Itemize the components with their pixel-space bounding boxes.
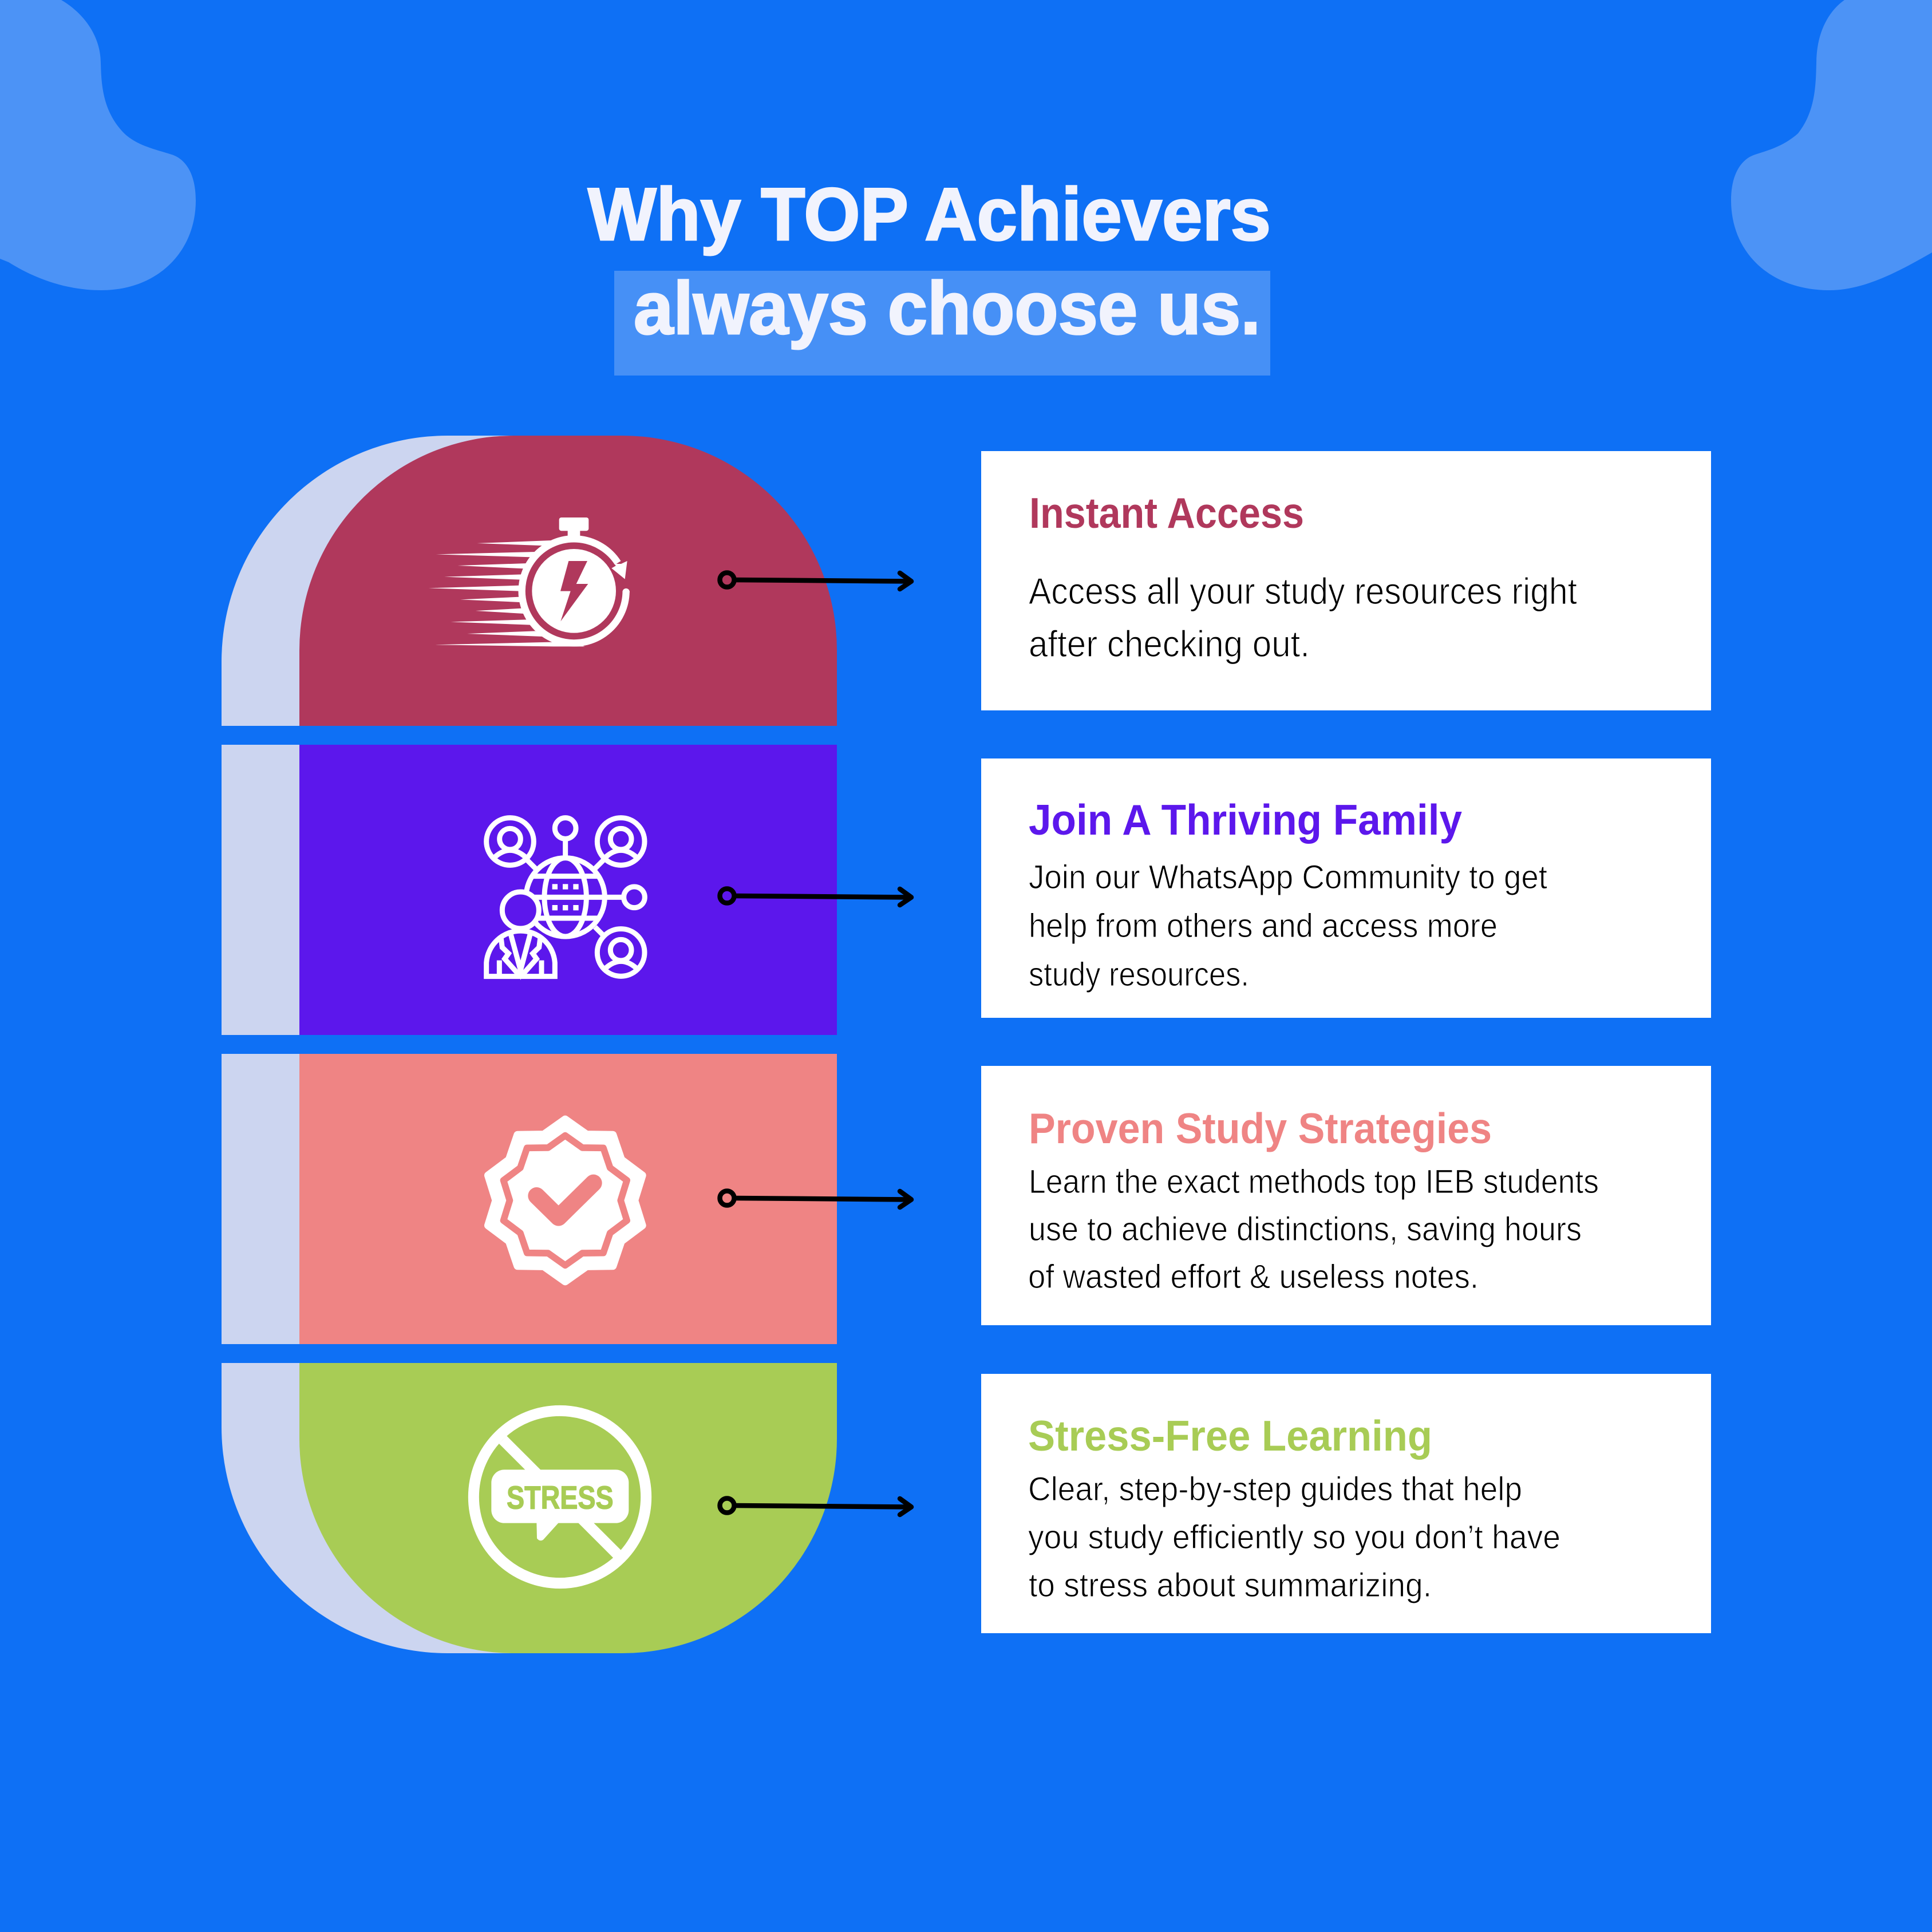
front layer [299, 745, 837, 1035]
panel: stress-free learning pill segment [222, 1363, 837, 1653]
card: stress-free learning [981, 1374, 1711, 1633]
card: proven study strategies [981, 1066, 1711, 1325]
back layer [222, 1363, 572, 1653]
card heading: Join A Thriving Family [1029, 796, 1462, 844]
card body: you study efficiently so you don’t have [1028, 1519, 1560, 1556]
card body [1029, 859, 1547, 993]
card body [1028, 1471, 1560, 1604]
icon: badge with check mark [488, 1119, 642, 1282]
card body: after checking out. [1029, 623, 1310, 665]
panel: instant access pill segment [222, 436, 837, 726]
title line 2: always choose us. [634, 266, 1261, 350]
card body: use to achieve distinctions, saving hours [1029, 1211, 1582, 1248]
card heading: Proven Study Strategies [1029, 1104, 1492, 1152]
back layer [222, 745, 572, 1035]
card body: help from others and access more [1029, 907, 1498, 945]
icon: global community network [487, 818, 645, 977]
panel: join a thriving family pill segment [222, 745, 837, 1035]
title [588, 172, 1271, 376]
decorative blob: top left [0, 0, 196, 290]
icon: no stress sign: STRESS [507, 1480, 614, 1516]
front layer [299, 1054, 837, 1344]
card heading: Instant Access [1029, 489, 1304, 537]
title line 1: Why TOP Achievers [588, 172, 1271, 256]
card: join a thriving family [981, 758, 1711, 1018]
panel: proven study strategies pill segment [222, 1054, 837, 1344]
card body [1028, 1163, 1599, 1295]
back layer [222, 1054, 572, 1344]
card body [1029, 570, 1577, 665]
card body: to stress about summarizing. [1029, 1567, 1432, 1604]
card body: of wasted effort & useless notes. [1028, 1258, 1479, 1295]
back layer [222, 436, 572, 726]
card body: study resources. [1029, 956, 1249, 993]
card body: Learn the exact methods top IEB students [1029, 1163, 1599, 1200]
card heading: Stress-Free Learning [1028, 1412, 1432, 1460]
arrow: instant access [720, 572, 911, 589]
arrow: proven study strategies [720, 1191, 911, 1207]
title highlight box [614, 271, 1270, 376]
front layer [299, 436, 837, 726]
card: instant access [981, 451, 1711, 710]
card body: Clear, step-by-step guides that help [1028, 1471, 1522, 1508]
card body: Join our WhatsApp Community to get [1029, 859, 1547, 896]
card body: Access all your study resources right [1029, 570, 1577, 612]
arrow: join a thriving family [720, 888, 911, 905]
icon: stopwatch with speed lines [429, 517, 630, 646]
arrow: stress-free learning [720, 1499, 911, 1515]
decorative blob: top right [1731, 0, 1932, 290]
front layer [299, 1363, 837, 1653]
icon: no stress sign [473, 1411, 646, 1583]
